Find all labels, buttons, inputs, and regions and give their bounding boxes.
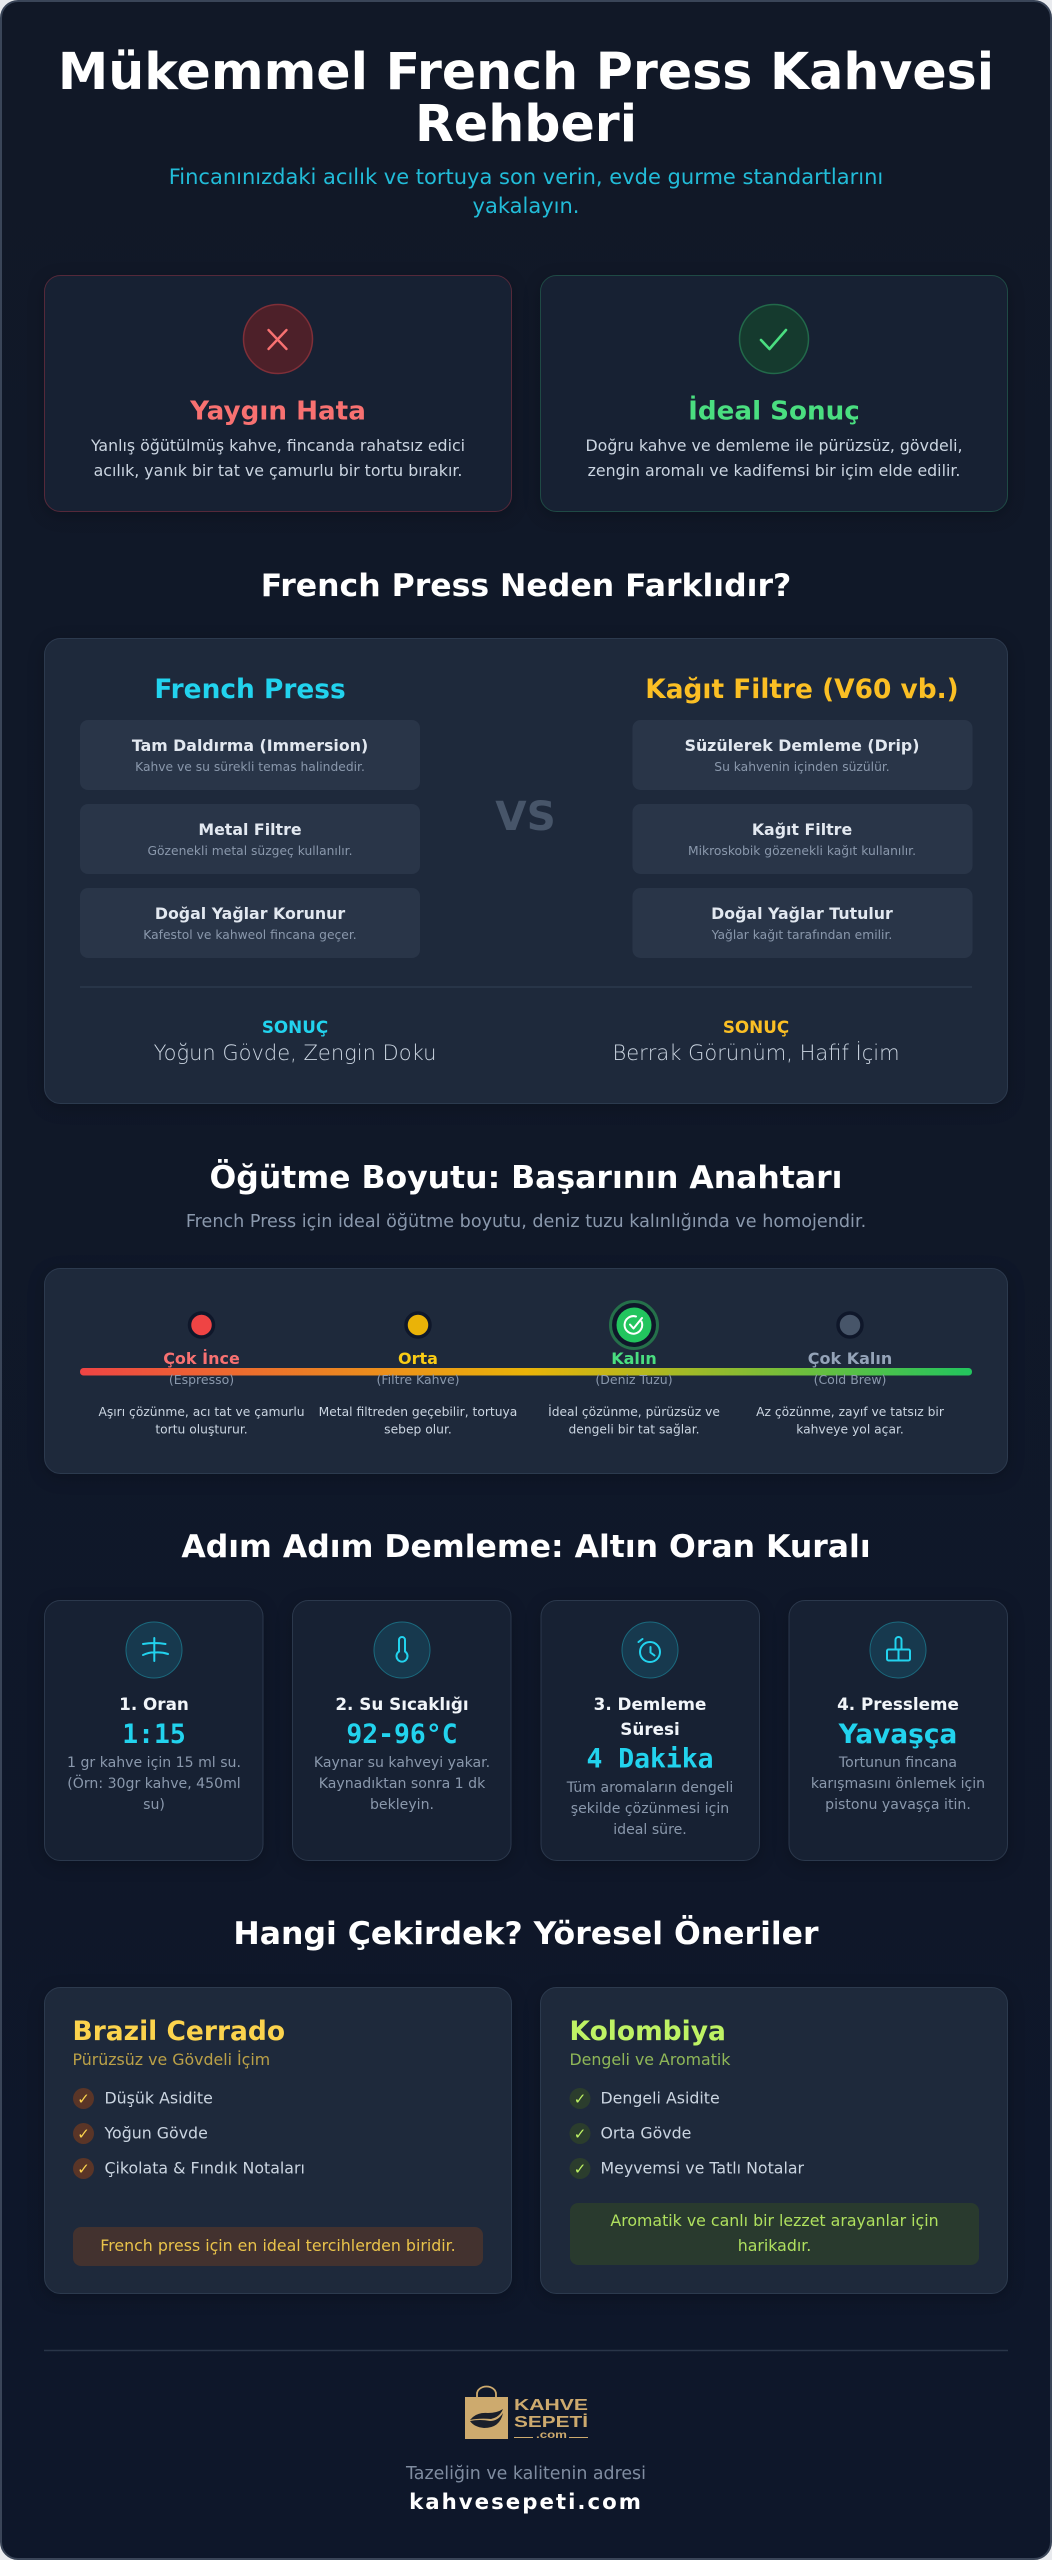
grind: medium: (Filtre Kahve) (376, 1372, 460, 1387)
step text (566, 1780, 733, 1838)
title: Rehberi (415, 94, 637, 153)
row: natural oils: Doğal Yağlar Korunur (155, 904, 345, 923)
panel: Brazil Cerrado (44, 1988, 512, 2294)
column: paper filter (632, 674, 972, 958)
step title (594, 1694, 706, 1739)
subtitle: Fincanınızdaki acılık ve tortuya son verin, evde gurme standartlarını (169, 165, 883, 189)
feature: notes: ✓ (77, 2160, 90, 2178)
feature: balanced acidity: Dengeli Asidite (600, 2088, 720, 2108)
grind gradient bar (80, 1368, 972, 1376)
heading: grind size section: Öğütme Boyutu: Başarının Anahtarı (210, 1158, 842, 1196)
bean name: Kolombiya (570, 2016, 726, 2047)
footer logo: Kahve Sepeti (465, 2386, 588, 2441)
icon: shopping bag (465, 2386, 508, 2439)
row: natural oils (80, 888, 420, 958)
result: paper filter (612, 1017, 900, 1065)
grind: very fine: Çok İnce (163, 1349, 240, 1368)
step title: 2. Su Sıcaklığı (335, 1694, 469, 1714)
grind: very fine: Aşırı çözünme, acı tat ve çamurlu (98, 1405, 305, 1419)
section description: French Press için ideal öğütme boyutu, deniz tuzu kalınlığında ve homojendir. (186, 1212, 866, 1232)
grind: coarse, ideal: (Deniz Tuzu) (595, 1372, 673, 1387)
grind: medium (319, 1313, 517, 1436)
card: step 2 temperature (292, 1600, 511, 1860)
feature: low acidity: Düşük Asidite (104, 2088, 213, 2108)
heading: comparison section: French Press Neden Farklıdır? (261, 568, 791, 604)
grind: coarse, ideal: dengeli bir tat sağlar. (568, 1422, 700, 1436)
row: paper filter: Mikroskobik gözenekli kağıt kullanılır. (688, 844, 916, 858)
header: title and subtitle (58, 42, 994, 218)
bean name: Brazil Cerrado (72, 2016, 285, 2047)
result: French Press: SONUÇ (262, 1017, 328, 1037)
grind: medium: Metal filtreden geçebilir, tortuya (319, 1405, 517, 1419)
column: French Press (80, 674, 420, 958)
row: metal filter (80, 804, 420, 874)
recommendation note: French press için en ideal tercihlerden biridir. (100, 2236, 456, 2255)
feature: heavy body (73, 2123, 208, 2144)
icon: cross (244, 304, 312, 374)
icon: thermometer (374, 1622, 430, 1678)
row: paper filter: Kağıt Filtre (752, 820, 852, 839)
recommendation note: Aromatik ve canlı bir lezzet arayanlar için (610, 2211, 939, 2230)
subtitle: yakalayın. (473, 194, 579, 218)
card: step 3 steep time (541, 1600, 760, 1860)
step text: pistonu yavaşça itin. (825, 1797, 971, 1813)
heading: brewing section: Adım Adım Demleme: Altın Oran Kuralı (181, 1529, 871, 1565)
panel: ideal result (540, 276, 1008, 512)
icon: ideal check (625, 1316, 642, 1334)
logo wordmark: KAHVE (514, 2397, 588, 2414)
grind: very fine: tortu oluşturur. (155, 1422, 248, 1436)
grind: coarse, ideal: İdeal çözünme, pürüzsüz ve (548, 1404, 720, 1419)
title: Mükemmel French Press Kahvesi (58, 42, 994, 101)
row: metal filter: Metal Filtre (198, 820, 302, 839)
grind: very coarse: (Cold Brew) (814, 1372, 886, 1387)
icon: timer (622, 1622, 678, 1678)
recommendation note (570, 2203, 979, 2265)
step text: şekilde çözünmesi için (571, 1801, 729, 1817)
panel: grind scale (44, 1268, 1008, 1474)
subtitle (169, 165, 883, 218)
row: drip (632, 720, 972, 790)
heading: Yaygın Hata: Yaygın Hata (189, 396, 366, 426)
recommendation note (73, 2227, 483, 2266)
row: immersion: Kahve ve su sürekli temas halindedir. (135, 760, 365, 774)
step value: Yavaşça (838, 1719, 957, 1750)
description (90, 436, 465, 480)
step text (811, 1755, 985, 1813)
row: drip: Su kahvenin içinden süzülür. (714, 760, 890, 774)
step value: 92-96°C (346, 1719, 458, 1750)
step text (314, 1755, 490, 1813)
feature: medium body: ✓ (574, 2125, 586, 2143)
step text: (Örn: 30gr kahve, 450ml (67, 1774, 241, 1792)
card: step 4 press (789, 1600, 1008, 1860)
panel: common mistake (44, 276, 512, 512)
row: paper filter (632, 804, 972, 874)
description: acılık, yanık bir tat ve çamurlu bir tortu bırakır. (94, 461, 462, 480)
result: French Press: Yoğun Gövde, Zengin Doku (154, 1041, 436, 1065)
description: zengin aromalı ve kadifemsi bir içim elde edilir. (588, 461, 960, 480)
step text: 1 gr kahve için 15 ml su. (67, 1755, 241, 1771)
row: oils retained (632, 888, 972, 958)
grind: very fine: (Espresso) (169, 1372, 234, 1387)
description: Yanlış öğütülmüş kahve, fincanda rahatsız edici (90, 436, 465, 455)
bean tagline: Dengeli ve Aromatik (570, 2050, 731, 2069)
step text: Tortunun fincana (838, 1755, 957, 1771)
result: paper filter: Berrak Görünüm, Hafif İçim (612, 1040, 900, 1065)
grind: very coarse: Az çözünme, zayıf ve tatsız bir (756, 1405, 945, 1419)
step title: Süresi (620, 1719, 680, 1739)
step title: 4. Pressleme (837, 1694, 959, 1714)
feature: low acidity: ✓ (77, 2090, 90, 2108)
logo wordmark (514, 2397, 588, 2441)
icon: ratio scale (126, 1622, 182, 1678)
feature: medium body: Orta Gövde (600, 2124, 691, 2142)
step value: 1:15 (122, 1719, 186, 1750)
feature: fruity notes: Meyvemsi ve Tatlı Notalar (600, 2158, 805, 2178)
VS label: VS (495, 792, 556, 840)
step text: karışmasını önlemek için (811, 1776, 985, 1792)
step value: 4 Dakika (586, 1744, 714, 1774)
column heading: French Press (154, 674, 346, 705)
description: Doğru kahve ve demleme ile pürüzsüz, gövdeli, (585, 436, 963, 455)
step text: Tüm aromaların dengeli (566, 1780, 733, 1796)
heading: beans section: Hangi Çekirdek? Yöresel Öneriler (233, 1914, 819, 1952)
grind: very fine (98, 1313, 305, 1436)
icon: check (740, 304, 808, 374)
footer website: kahvesepeti.com (409, 2490, 643, 2515)
footer tagline: Tazeliğin ve kalitenin adresi (405, 2464, 646, 2484)
card: step 1 ratio (44, 1600, 263, 1860)
step title: 1. Oran (119, 1694, 189, 1714)
grind: medium: sebep olur. (384, 1422, 452, 1436)
row: natural oils: Kafestol ve kahweol fincana geçer. (143, 928, 357, 942)
step text (67, 1755, 241, 1813)
feature: fruity notes: ✓ (574, 2160, 586, 2178)
bean tagline: Pürüzsüz ve Gövdeli İçim (72, 2050, 270, 2069)
column heading: Kağıt Filtre (V60 vb.) (645, 674, 959, 705)
logo wordmark: SEPETİ (514, 2413, 588, 2431)
row: immersion (80, 720, 420, 790)
feature: medium body (570, 2123, 691, 2144)
row: immersion: Tam Daldırma (Immersion) (132, 736, 368, 755)
feature: notes: Çikolata & Fındık Notaları (104, 2158, 305, 2178)
grind: very coarse: Çok Kalın (808, 1349, 892, 1368)
feature: heavy body: ✓ (77, 2125, 90, 2143)
description (585, 436, 963, 480)
grind: medium: Orta (398, 1349, 438, 1368)
grind: coarse, ideal (548, 1302, 720, 1436)
panel: Kolombiya (540, 1988, 1008, 2294)
grind: very coarse: kahveye yol açar. (796, 1422, 904, 1436)
result: paper filter: SONUÇ (723, 1017, 789, 1037)
row: drip: Süzülerek Demleme (Drip) (685, 736, 919, 755)
row: oils retained: Yağlar kağıt tarafından emilir. (711, 928, 892, 942)
row: metal filter: Gözenekli metal süzgeç kullanılır. (148, 844, 352, 858)
result: French Press (154, 1017, 436, 1065)
heading: İdeal Sonuç: İdeal Sonuç (688, 394, 860, 426)
icon: plunger (870, 1622, 926, 1678)
step title: 3. Demleme (594, 1694, 706, 1714)
panel: comparison (44, 638, 1008, 1104)
step text: su) (143, 1797, 165, 1813)
step text: Kaynadıktan sonra 1 dk (319, 1776, 486, 1792)
logo wordmark: .com (536, 2429, 567, 2441)
step text: ideal süre. (613, 1822, 687, 1838)
feature: heavy body: Yoğun Gövde (104, 2124, 208, 2142)
step text: Kaynar su kahveyi yakar. (314, 1755, 490, 1771)
title (58, 42, 994, 153)
row: oils retained: Doğal Yağlar Tutulur (711, 904, 893, 923)
step text: bekleyin. (370, 1797, 434, 1813)
grind: very coarse (756, 1313, 945, 1436)
recommendation note: harikadır. (738, 2236, 811, 2255)
feature: balanced acidity: ✓ (574, 2090, 586, 2108)
grind: coarse, ideal: Kalın (611, 1349, 657, 1368)
